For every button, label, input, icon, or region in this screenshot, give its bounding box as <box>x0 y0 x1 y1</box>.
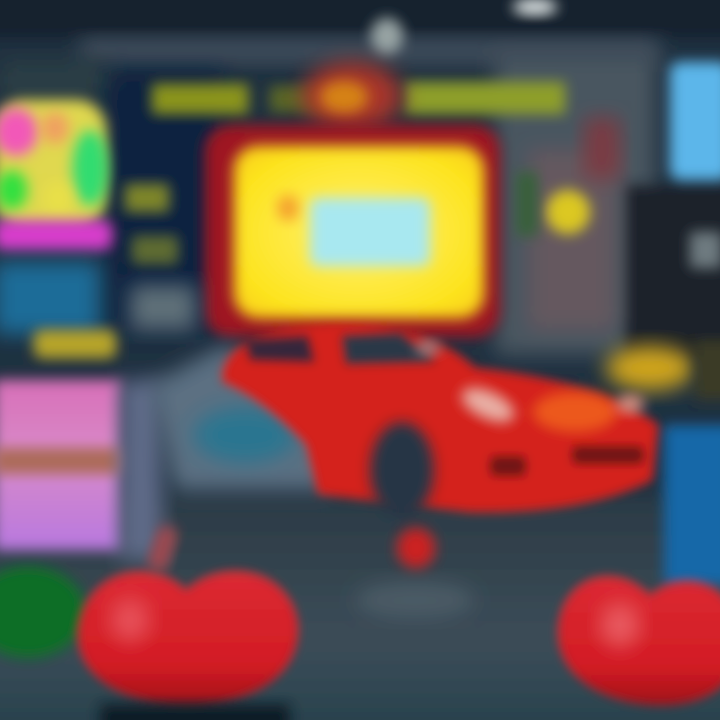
car <box>150 324 658 518</box>
title banner <box>152 62 565 130</box>
left red apple <box>78 524 298 705</box>
left kiosk: yellow label <box>34 330 116 358</box>
floor <box>0 495 720 720</box>
right red apple <box>558 576 720 705</box>
right dark corner <box>695 340 720 400</box>
screen: orange glow <box>277 195 299 221</box>
right poster <box>516 118 620 330</box>
bottom shadow <box>100 704 290 720</box>
screen: red frame <box>205 125 500 337</box>
screen: yellow panel <box>234 146 484 318</box>
car: rear teal door <box>193 407 297 463</box>
left kiosk: pink panel <box>0 380 162 560</box>
floor reflection <box>355 582 475 618</box>
car: window highlight <box>416 341 440 355</box>
car: grille <box>572 446 644 464</box>
right yellow car <box>606 346 694 390</box>
screen: light blue centre <box>310 198 430 266</box>
car: headlight <box>616 395 644 413</box>
left kiosk: rainbow display <box>0 100 112 250</box>
car: orange bonnet <box>533 392 617 432</box>
car: rear grey body <box>150 345 330 490</box>
left kiosk: blue section <box>0 262 100 334</box>
car: front wheel <box>370 422 434 518</box>
right blue display <box>670 62 720 180</box>
car: red body <box>222 324 658 512</box>
right grey unit <box>690 232 720 268</box>
car: windows <box>246 336 314 362</box>
right blue column <box>664 425 720 585</box>
green apple <box>0 566 86 658</box>
red marker <box>397 528 435 568</box>
middle side signs <box>125 184 196 330</box>
car: bonnet highlight <box>457 381 519 429</box>
